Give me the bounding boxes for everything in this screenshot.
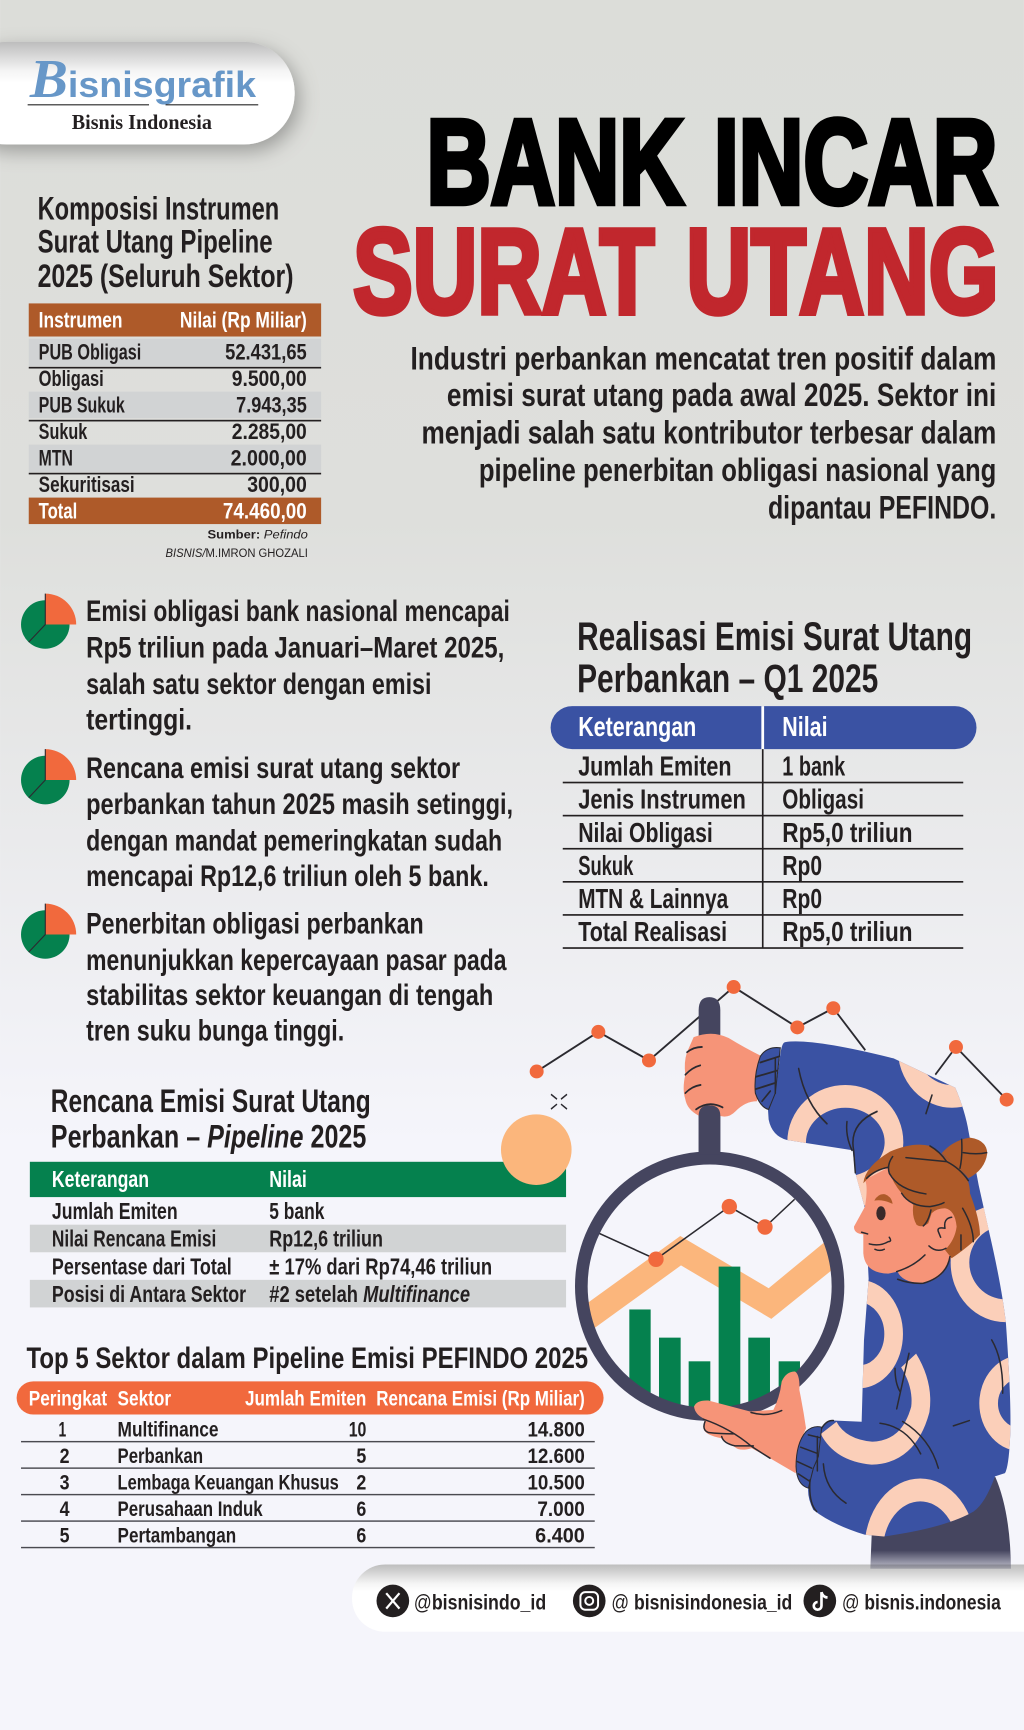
bullet text 1: Rp5 triliun pada Januari–Maret 2025, bbox=[86, 632, 504, 665]
source: Sumber: Pefindo bbox=[207, 527, 308, 541]
hair bun bbox=[942, 1138, 987, 1178]
intro paragraph bbox=[410, 341, 996, 526]
table: rencana: Keterangan bbox=[52, 1166, 149, 1192]
handle lower section bbox=[699, 1105, 720, 1154]
bullet text 3: menunjukkan kepercayaan pasar pada bbox=[86, 944, 507, 977]
table: top 5: 4 bbox=[60, 1497, 70, 1521]
table: instrumen: 2.285,00 bbox=[232, 419, 307, 444]
table: instrumen: 2.000,00 bbox=[231, 446, 307, 471]
table: top 5: 7.000 bbox=[537, 1497, 585, 1521]
table: top 5: 10.500 bbox=[527, 1470, 585, 1494]
logo pill bbox=[0, 42, 295, 145]
heading: rencana bbox=[51, 1083, 371, 1154]
illustration: person with magnifier bbox=[530, 980, 1024, 1611]
table: instrumen: Sekuritisasi bbox=[39, 472, 135, 497]
accent circle over header bbox=[501, 1114, 572, 1185]
table: top 5: 5 bbox=[356, 1444, 366, 1468]
lower cuff bbox=[796, 1427, 822, 1488]
table: instrumen: Sukuk bbox=[39, 419, 88, 444]
heading: rencana: Rencana Emisi Surat Utang bbox=[51, 1083, 371, 1119]
heading: komposisi: Surat Utang Pipeline bbox=[38, 224, 273, 260]
bullet text 2: dengan mandat pemeringkatan sudah bbox=[86, 825, 502, 858]
bullet text 2 bbox=[86, 752, 513, 893]
face bbox=[854, 1167, 963, 1283]
bullet 1 bbox=[21, 594, 510, 736]
table: instrumen: 52.431,65 bbox=[225, 340, 307, 365]
table: instrumen: PUB Sukuk bbox=[39, 393, 125, 418]
table: top 5: 1 bbox=[59, 1418, 66, 1442]
credit: BISNIS/M.IMRON GHOZALI bbox=[166, 546, 308, 560]
table: top 5: 2 bbox=[60, 1444, 70, 1468]
magnifier ring bbox=[575, 1151, 844, 1421]
lower hand and cuff bbox=[694, 1340, 1003, 1512]
bullet text 2: perbankan tahun 2025 masih setinggi, bbox=[86, 788, 513, 821]
table: top 5: 6 bbox=[356, 1497, 366, 1521]
bullet 2 bbox=[21, 749, 513, 893]
table: top 5: 12.600 bbox=[527, 1444, 585, 1468]
heading: top 5: Top 5 Sektor dalam Pipeline Emisi PEFINDO 2025 bbox=[27, 1342, 588, 1375]
hair bbox=[863, 1145, 980, 1258]
heading: komposisi: 2025 (Seluruh Sektor) bbox=[38, 258, 294, 294]
lower hand bbox=[694, 1372, 806, 1473]
table: realisasi: 1 bank bbox=[782, 751, 845, 782]
table: rencana: Persentase dari Total bbox=[52, 1253, 232, 1279]
icon: instagram bbox=[573, 1585, 606, 1617]
heading: realisasi bbox=[577, 615, 972, 701]
table: top 5: 6 bbox=[356, 1523, 366, 1547]
table: top 5: Rencana Emisi (Rp Miliar) bbox=[376, 1387, 585, 1411]
handle: instagram: @ bisnisindonesia_id bbox=[611, 1591, 792, 1615]
heading: rencana: Perbankan – Pipeline 2025 bbox=[51, 1118, 366, 1154]
logo rule left bbox=[28, 104, 149, 105]
table: top 5: 5 bbox=[60, 1523, 70, 1547]
line chart bbox=[530, 980, 1014, 1107]
hand lines bbox=[703, 1411, 782, 1458]
table: realisasi: Rp0 bbox=[782, 883, 822, 914]
table: top 5: Lembaga Keuangan Khusus bbox=[118, 1470, 339, 1494]
bullet text 3 bbox=[86, 907, 507, 1047]
bullet text 3: Penerbitan obligasi perbankan bbox=[86, 907, 424, 940]
face and hair lines bbox=[862, 1139, 987, 1283]
table: top 5: 2 bbox=[356, 1470, 366, 1494]
table: rencana: #2 setelah Multifinance bbox=[269, 1281, 470, 1307]
title line 1: BANK bbox=[426, 96, 684, 230]
table: rencana: Rp12,6 triliun bbox=[269, 1226, 383, 1252]
table: top 5: Perusahaan Induk bbox=[118, 1497, 263, 1521]
title line 1 bbox=[426, 96, 997, 230]
panel: realisasi bbox=[551, 615, 976, 949]
title bbox=[353, 96, 999, 339]
table: rencana: Nilai Rencana Emisi bbox=[52, 1226, 216, 1252]
table: top 5 bbox=[17, 1381, 604, 1548]
table: top 5: Perbankan bbox=[118, 1444, 203, 1468]
panel: komposisi instrumen bbox=[29, 191, 321, 560]
table: top 5: 6.400 bbox=[535, 1523, 585, 1547]
table: instrumen: PUB Obligasi bbox=[39, 340, 141, 365]
table: realisasi: Nilai Obligasi bbox=[578, 817, 713, 848]
icon: pie bbox=[21, 594, 76, 649]
table: realisasi: Rp0 bbox=[782, 850, 822, 881]
table: top 5: 14.800 bbox=[527, 1418, 585, 1442]
table: rencana bbox=[30, 1114, 572, 1307]
table: rencana: 5 bank bbox=[269, 1198, 325, 1224]
table: realisasi: Jumlah Emiten bbox=[578, 751, 732, 782]
magnifier handle bbox=[699, 997, 720, 1154]
bullet text 1: tertinggi. bbox=[86, 703, 192, 736]
bullet text 1 bbox=[86, 595, 510, 736]
table: instrumen: MTN bbox=[39, 446, 73, 471]
head bbox=[854, 1138, 987, 1283]
heading: komposisi: Komposisi Instrumen bbox=[38, 191, 279, 227]
table: instrumen: 300,00 bbox=[247, 472, 307, 497]
logo subtitle: Bisnis Indonesia bbox=[72, 110, 212, 134]
table: instrumen bbox=[29, 303, 321, 524]
table: instrumen: Nilai (Rp Miliar) bbox=[180, 308, 307, 333]
table: realisasi bbox=[551, 706, 976, 949]
table: rencana: Jumlah Emiten bbox=[52, 1198, 178, 1224]
icon: pie bbox=[21, 904, 76, 959]
icon: x bbox=[377, 1585, 409, 1617]
table: instrumen: 9.500,00 bbox=[232, 366, 307, 391]
heading: realisasi: Perbankan – Q1 2025 bbox=[577, 657, 878, 701]
table: top 5: 3 bbox=[60, 1470, 70, 1494]
table: realisasi: MTN & Lainnya bbox=[578, 883, 729, 914]
table: realisasi: Keterangan bbox=[578, 711, 696, 742]
table: top 5: Multifinance bbox=[118, 1418, 219, 1442]
bullet text 3: tren suku bunga tinggi. bbox=[86, 1014, 344, 1047]
table: realisasi: Nilai bbox=[782, 711, 828, 742]
table: realisasi: Total Realisasi bbox=[578, 916, 727, 947]
table: realisasi: Rp5,0 triliun bbox=[782, 916, 913, 947]
table: top 5: 10 bbox=[349, 1418, 366, 1442]
eyebrow bbox=[874, 1194, 893, 1204]
star mark bbox=[551, 1094, 567, 1109]
panel: rencana emisi bbox=[30, 1083, 572, 1307]
table: realisasi: Rp5,0 triliun bbox=[782, 817, 913, 848]
table: rencana: ± 17% dari Rp74,46 triliun bbox=[269, 1253, 492, 1279]
bullet text 1: salah satu sektor dengan emisi bbox=[86, 668, 431, 701]
table: top 5: Jumlah Emiten bbox=[245, 1387, 366, 1411]
table: instrumen: Instrumen bbox=[39, 308, 123, 333]
handle: x: @bisnisindo_id bbox=[414, 1591, 546, 1615]
bullet 3 bbox=[21, 904, 507, 1047]
title line 2 bbox=[353, 205, 999, 339]
table: instrumen: Obligasi bbox=[39, 366, 104, 391]
table: rencana: Posisi di Antara Sektor bbox=[52, 1281, 246, 1307]
bullet text 2: mencapai Rp12,6 triliun oleh 5 bank. bbox=[86, 860, 489, 893]
lens contents bbox=[587, 1199, 834, 1419]
eye bbox=[876, 1206, 886, 1220]
trousers bbox=[870, 1477, 1011, 1569]
title line 2: SURAT bbox=[353, 205, 654, 339]
table: realisasi: Sukuk bbox=[578, 850, 634, 881]
table: rencana: Nilai bbox=[269, 1166, 307, 1192]
bullet text 2: Rencana emisi surat utang sektor bbox=[86, 752, 460, 785]
finger lines bbox=[685, 1047, 723, 1109]
panel: top 5 sektor bbox=[17, 1342, 604, 1548]
table: top 5: Peringkat bbox=[29, 1387, 107, 1411]
table: instrumen: Total bbox=[39, 499, 77, 524]
table: realisasi: Obligasi bbox=[782, 784, 864, 815]
upper hand bbox=[684, 1034, 762, 1117]
table: top 5: Pertambangan bbox=[118, 1523, 236, 1547]
icon: pie bbox=[21, 749, 76, 804]
table: instrumen: 7.943,35 bbox=[236, 393, 307, 418]
sweater creases bbox=[797, 1340, 1003, 1512]
bullet text 3: stabilitas sektor keuangan di tengah bbox=[86, 979, 493, 1012]
upper cuff bbox=[755, 1048, 780, 1109]
heading: komposisi bbox=[38, 191, 294, 294]
table: top 5: Sektor bbox=[118, 1387, 172, 1411]
icon: tiktok bbox=[803, 1585, 836, 1617]
logo rule right bbox=[166, 104, 258, 105]
bullet text 1: Emisi obligasi bank nasional mencapai bbox=[86, 595, 510, 628]
sweater bbox=[768, 1041, 1010, 1536]
table: realisasi: Jenis Instrumen bbox=[578, 784, 746, 815]
logo wordmark: Bisnisgrafik bbox=[29, 48, 257, 109]
footer social bar bbox=[352, 1565, 1024, 1632]
table: instrumen: 74.460,00 bbox=[223, 499, 307, 524]
